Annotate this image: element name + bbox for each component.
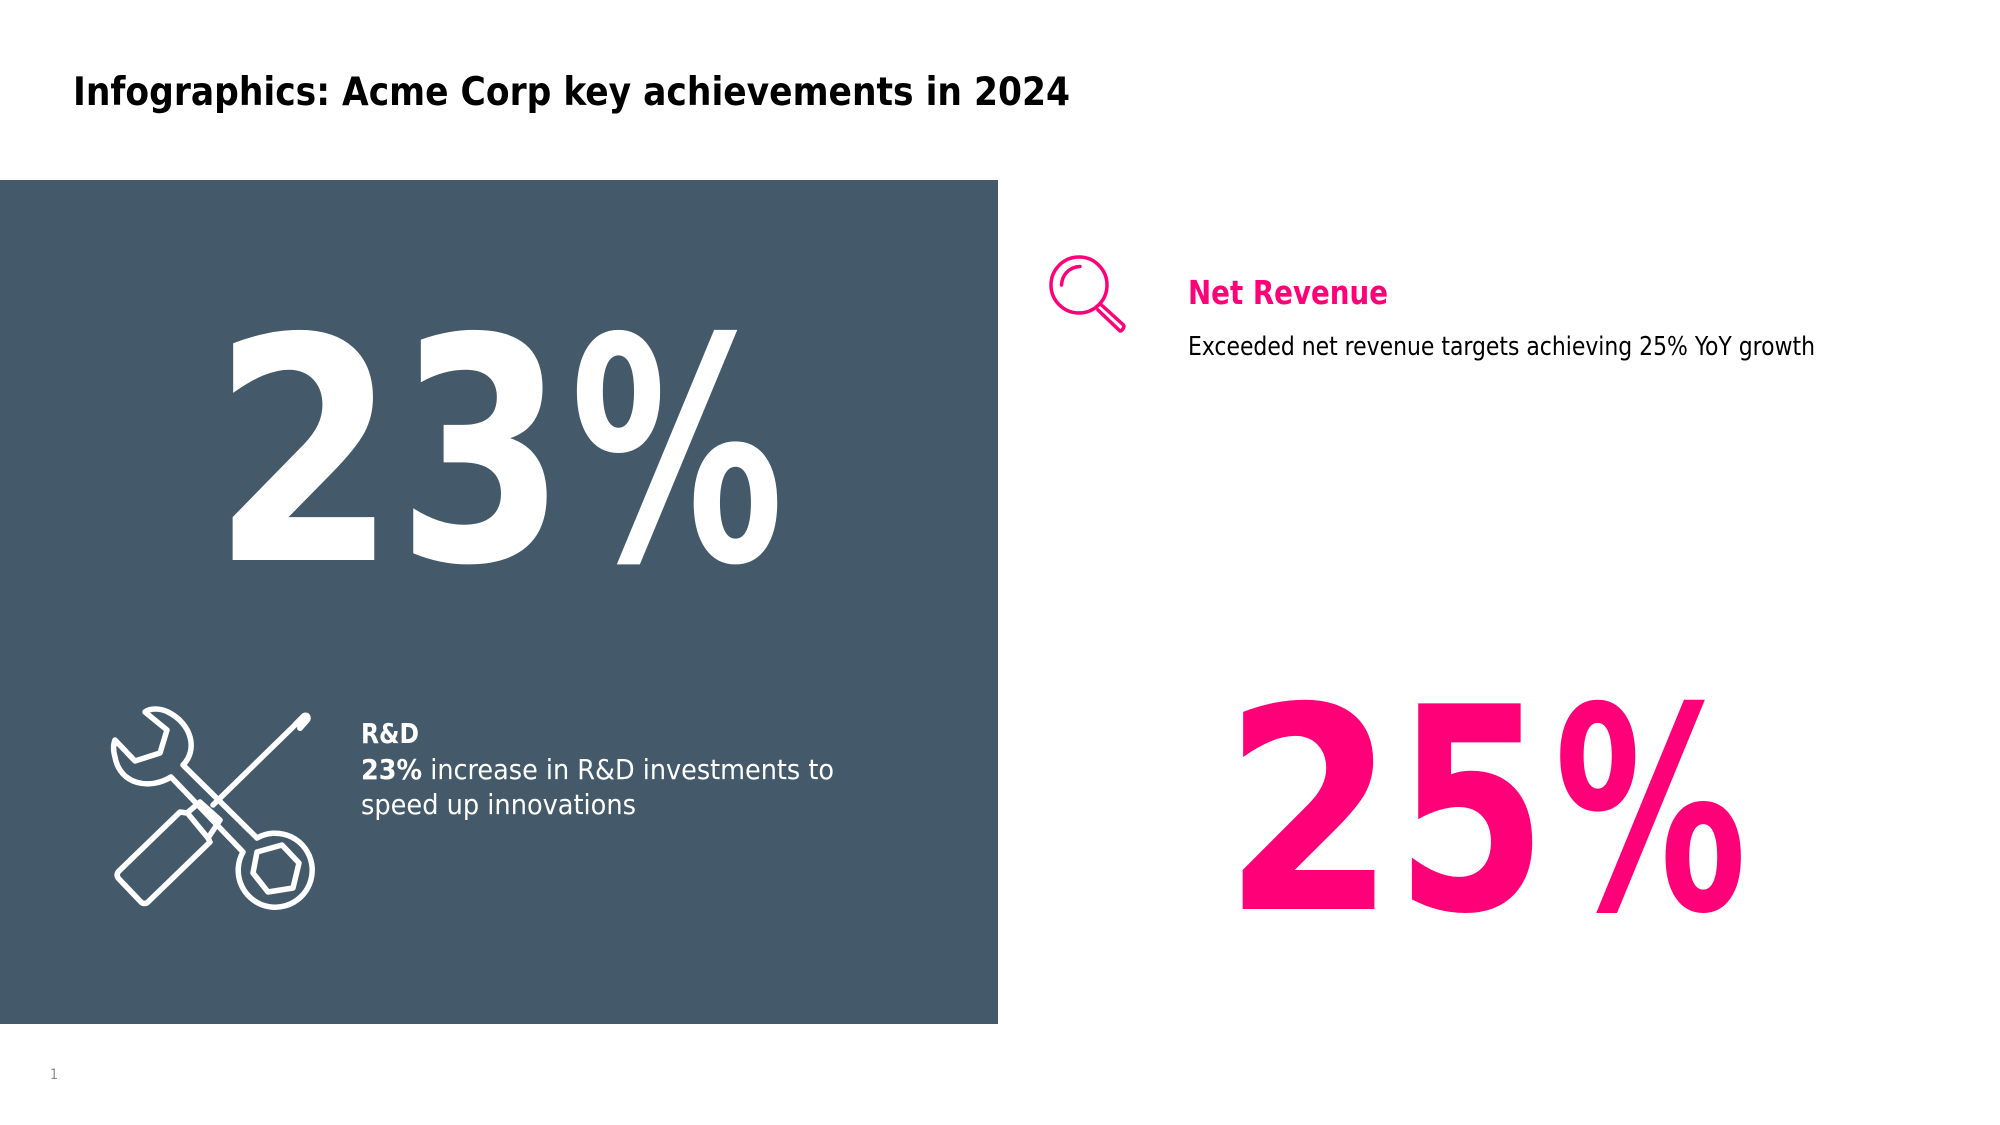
big number: 23%: 2 (212, 273, 398, 634)
text: R&D description: R&D (361, 717, 419, 750)
big number: 25%: 2 (1223, 647, 1396, 976)
big number: 23%: 3 (397, 273, 566, 634)
big number: 23% (212, 273, 784, 634)
text: Net Revenue description: Exceeded net revenue targets achieving 25% YoY growth (1188, 332, 1815, 362)
icon: wrench and screwdriver (114, 709, 312, 907)
big number: 25%: 5 (1395, 647, 1548, 976)
page number: 1 (50, 1067, 58, 1083)
big number: 25% (1223, 647, 1747, 976)
text: R&D description: speed up innovations (361, 788, 636, 821)
panel: R&D (0, 180, 998, 1024)
text: R&D description (361, 717, 834, 821)
text: R&D description: 23% increase in R&D investments to (361, 753, 834, 786)
title: Infographics: Acme Corp key achievements in 2024 (73, 70, 1070, 115)
heading: Net Revenue: Net Revenue (1188, 273, 1388, 312)
big number: 23%: % (570, 273, 784, 634)
icon: magnifying glass (1051, 257, 1124, 331)
big number: 25%: % (1554, 647, 1747, 976)
